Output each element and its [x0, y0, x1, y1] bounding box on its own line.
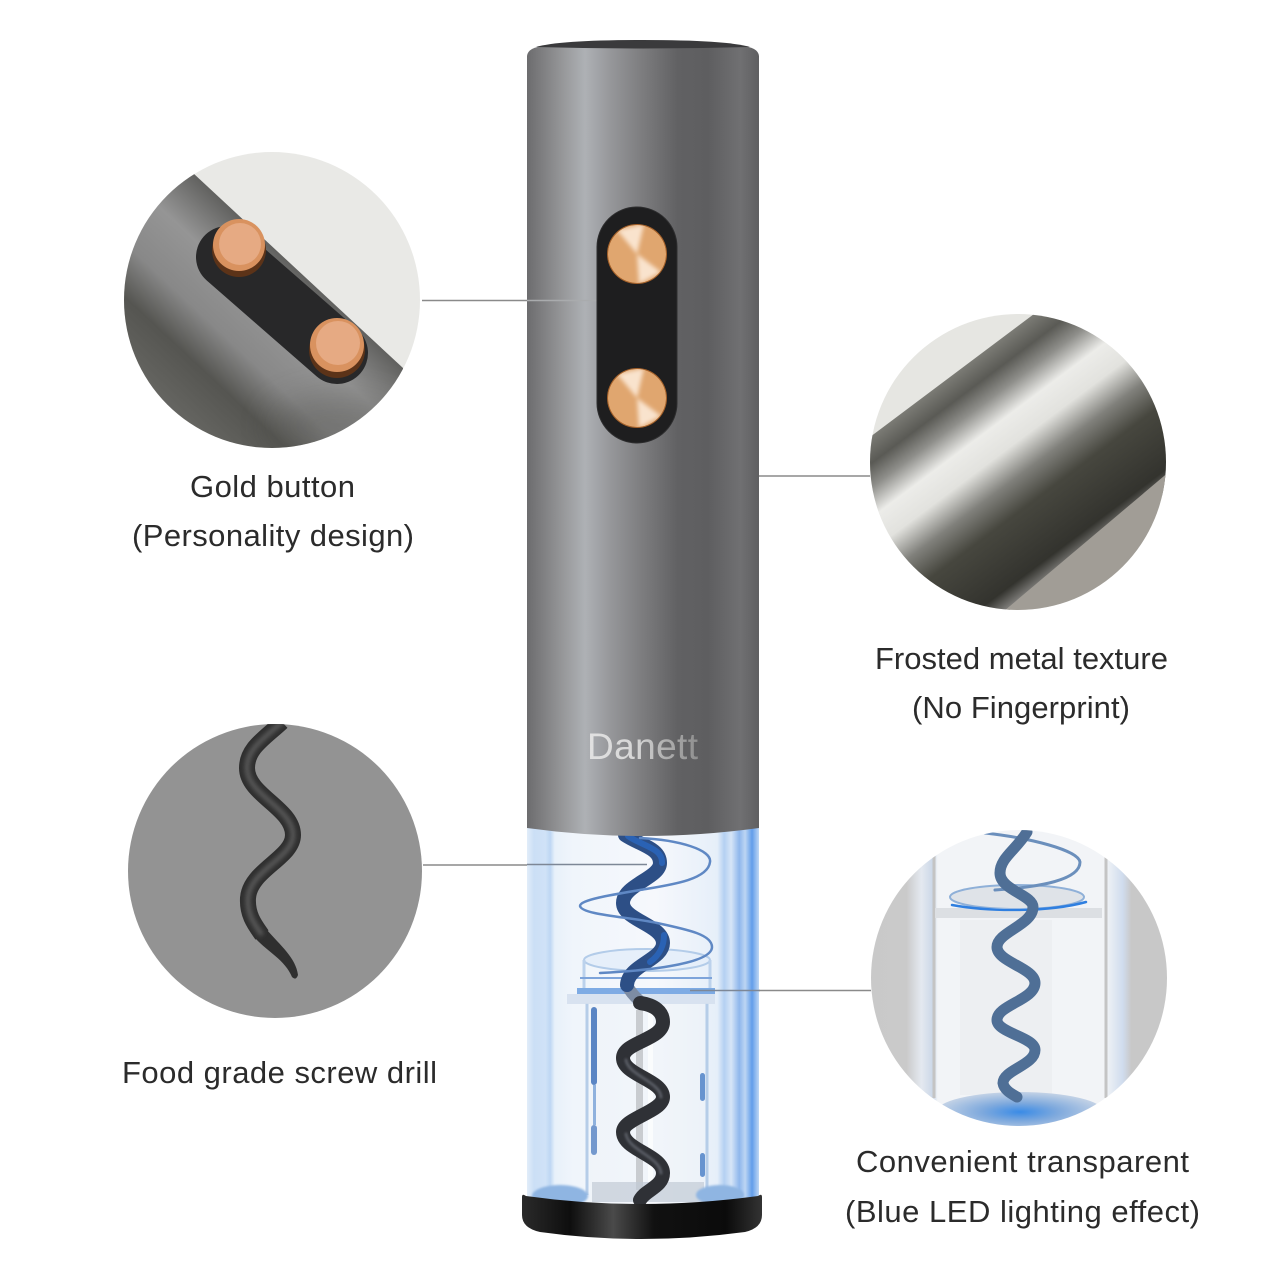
transparent lower section: [527, 825, 760, 1210]
top cap: [536, 40, 750, 48]
panel: transparent LED detail: [845, 830, 1200, 1229]
panel: gold button detail: [124, 152, 420, 552]
callout lines inside the glass: [527, 864, 760, 990]
caption: screw drill: Food grade screw drill: [122, 1055, 437, 1090]
panel: screw drill detail: [120, 715, 437, 1090]
brand name: Danett: [587, 726, 699, 767]
detail circle: screw closeup: [128, 724, 422, 1018]
leader line crossing the body: [527, 300, 597, 302]
callout line: gold button: [422, 300, 527, 302]
caption: transparent section: (Blue LED lighting effect): [845, 1194, 1200, 1229]
gold button bottom: [607, 368, 667, 428]
caption: frosted metal: Frosted metal texture: [875, 641, 1168, 676]
caption: transparent section: Convenient transparent: [856, 1144, 1189, 1179]
button plate: [597, 207, 677, 443]
base ring: [522, 1195, 762, 1239]
detail circle: LED closeup: [870, 830, 1170, 1132]
gold button top: [607, 224, 667, 284]
callout line: metal texture: [759, 475, 870, 477]
callout line: screw drill: [423, 864, 527, 866]
corkscrew: lower dark section: [623, 1003, 663, 1200]
glass jar foil cutter: [532, 949, 744, 1207]
detail circle: metal closeup: [870, 314, 1166, 610]
caption: transparent section: [845, 1144, 1200, 1229]
detail circle: gold button closeup: [124, 152, 420, 448]
callout line: transparent section: [759, 990, 871, 992]
caption: frosted metal: [875, 641, 1168, 725]
caption: gold button: (Personality design): [132, 518, 414, 553]
product: wine opener: [522, 40, 762, 1239]
caption: frosted metal: (No Fingerprint): [912, 690, 1130, 725]
caption: gold button: [132, 469, 414, 553]
metal body: [527, 46, 759, 836]
copper button upper: [212, 219, 266, 277]
panel: frosted metal detail: [870, 314, 1167, 724]
corkscrew: upper blue section: [580, 835, 712, 1003]
copper button lower: [309, 318, 365, 378]
infographic: electric wine opener features: [124, 40, 1198, 1239]
caption: gold button: Gold button: [190, 469, 355, 504]
